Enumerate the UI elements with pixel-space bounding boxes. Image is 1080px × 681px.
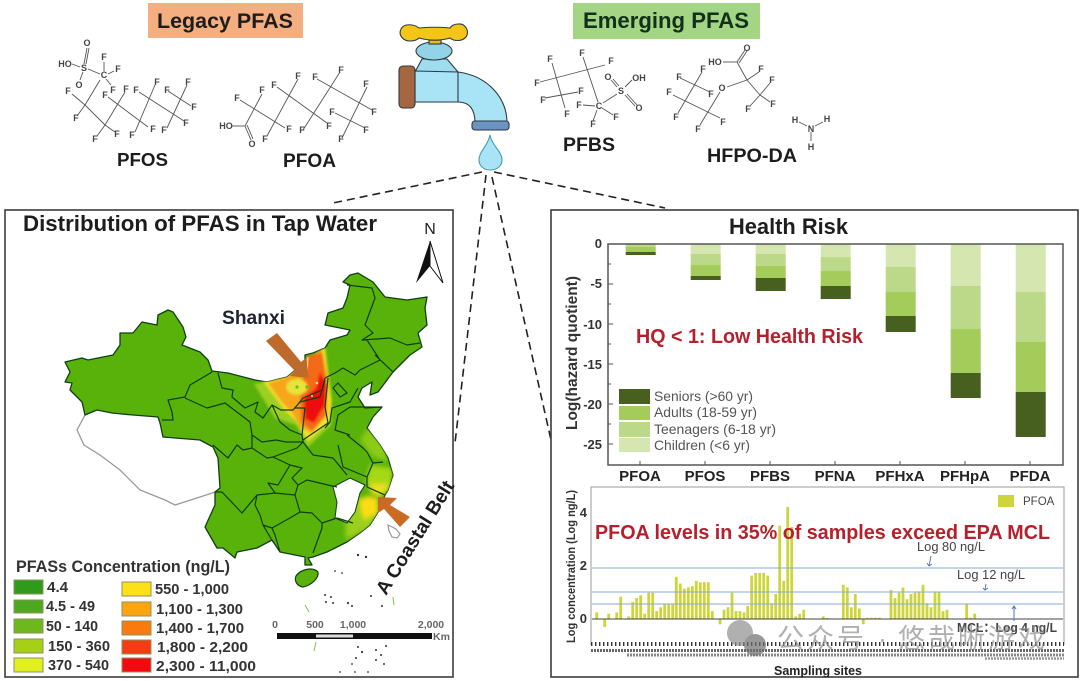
chemical structure: PFBS: F — [578, 86, 584, 96]
bar: PFHxA — [886, 244, 916, 332]
annotation: Log 80 ng/L — [917, 539, 985, 566]
label: A Coastal Belt: A Coastal Belt — [372, 477, 459, 599]
watermark text: 公众号·悠哉晰游戏 — [777, 624, 1045, 654]
x axis title: Sampling sites — [774, 664, 862, 678]
scale bar: Km — [433, 631, 450, 643]
bar: PFDA — [1016, 244, 1046, 437]
legend: PFASs concentration: 4.4 — [47, 579, 69, 596]
chemical structure: PFOS — [58, 38, 197, 144]
chemical structure: HFPO-DA: F — [720, 117, 726, 127]
panel: health risk — [551, 210, 1078, 678]
callout: low health risk: HQ < 1: Low Health Risk — [636, 326, 864, 348]
map: PFAS concentration across China — [65, 273, 427, 673]
arrow: pointing to Shanxi — [266, 333, 309, 378]
chemical structure: PFOA: F — [363, 79, 369, 89]
label: HFPO-DA: HFPO-DA — [707, 145, 797, 167]
panel: distribution of PFAS in tap water — [5, 210, 459, 677]
chemical structure: PFBS: O — [604, 72, 612, 82]
chemical structure: PFOS: S — [81, 63, 87, 73]
chemical structure: HFPO-DA: F — [770, 99, 776, 109]
chemical structure: ammonia — [792, 114, 830, 152]
chemical structure: PFBS: F — [590, 119, 596, 129]
y axis labels: -5 — [590, 276, 602, 291]
chemical structure: PFBS: F — [547, 54, 553, 64]
y axis labels: -20 — [583, 397, 602, 412]
chemical structure: PFBS: F — [579, 48, 585, 58]
bar chart: PFOA concentration by sampling site — [566, 487, 1064, 678]
annotation: MCL Log 4 ng/L — [957, 606, 1057, 635]
bar: PFBS — [756, 244, 786, 291]
label: PFBS: PFBS — [563, 134, 615, 156]
x axis ticks and site labels — [591, 644, 1064, 658]
chemical structure: PFOS: F — [65, 86, 71, 96]
y axis labels: 4 — [580, 505, 588, 520]
region: mainland base fill — [65, 273, 427, 565]
legend: PFASs concentration: 1,400 - 1,700 — [156, 620, 244, 637]
x axis labels: PFDA — [1010, 468, 1051, 485]
label: PFOS: PFOS — [117, 149, 168, 170]
bar chart: log hazard quotient by compound — [564, 236, 1063, 485]
chemical structure: PFOS: F — [191, 102, 197, 112]
chemical structure: PFOS: F — [150, 124, 156, 134]
chemical structure: PFOA: F — [262, 134, 268, 144]
icon: north arrow — [416, 221, 443, 283]
y axis labels: -25 — [583, 437, 602, 452]
heading: Legacy PFAS: Legacy PFAS — [157, 9, 293, 33]
chemical structure: PFOS: F — [110, 85, 116, 95]
chemical structure: PFBS: F — [540, 95, 546, 105]
chemical structure: PFBS: S — [618, 86, 624, 96]
legend: age groups — [619, 388, 776, 453]
legend: PFOA — [998, 495, 1055, 508]
legend: PFASs concentration: 550 - 1,000 — [155, 581, 229, 598]
chemical structure: PFOA: F — [338, 134, 344, 144]
chemical structure: PFBS: F — [534, 78, 540, 88]
connector: drop to distribution panel side — [455, 175, 486, 443]
scale bar: 500 — [306, 619, 324, 631]
y axis labels — [583, 236, 602, 452]
province boundaries — [162, 285, 420, 553]
chemical structure: ammonia: H — [824, 114, 830, 124]
legend: PFASs concentration: 2,300 - 11,000 — [156, 658, 256, 675]
chemical structure: PFOS: F — [185, 77, 191, 87]
heading: Legacy PFAS — [148, 3, 303, 38]
x axis labels: PFOS — [685, 468, 725, 485]
chemical structure: PFBS — [534, 48, 646, 129]
island: Hainan — [295, 569, 318, 587]
x axis labels: PFOA — [619, 468, 661, 485]
chemical structure: PFOA: F — [363, 125, 369, 135]
x axis labels: PFHpA — [940, 468, 990, 485]
legend: PFASs concentration — [14, 558, 256, 675]
connector: drop to health panel — [494, 172, 665, 208]
chemical structure: PFOA: F — [271, 80, 277, 90]
annotation: MCL Log 4 ng/L: MCL：Log 4 ng/L — [957, 620, 1057, 635]
label: PFOA: PFOA — [283, 151, 336, 172]
chemical structure: HFPO-DA: HO — [708, 57, 722, 67]
x axis labels: PFHxA — [875, 468, 925, 485]
scale bar — [272, 619, 450, 643]
legend: PFASs concentration: 50 - 140 — [46, 618, 98, 635]
island: Taiwan — [388, 525, 400, 538]
legend: age groups: Teenagers (6-18 yr) — [654, 421, 776, 437]
callout: PFOA exceedance: PFOA levels in 35% of samples exceed EPA MCL — [595, 522, 1050, 544]
legend: PFASs concentration: PFASs Concentration (ng/L) — [16, 558, 230, 576]
chemical structure: PFOA — [219, 65, 377, 149]
annotation: Log 12 ng/L — [957, 567, 1025, 590]
chemical structure: HFPO-DA: F — [676, 72, 682, 82]
icon: chat bubbles — [727, 620, 766, 656]
chemical structure: PFOS: F — [115, 64, 121, 74]
annotation: Log 12 ng/L: Log 12 ng/L — [957, 567, 1025, 582]
chemical structure: PFOA: F — [299, 125, 305, 135]
chemical structure: HFPO-DA: F — [695, 124, 701, 134]
x axis labels — [619, 468, 1051, 485]
icon: water drop — [479, 135, 502, 170]
x axis labels: PFNA — [815, 468, 856, 485]
chemical structure: PFOS: O — [83, 38, 91, 48]
bars: PFOA log concentration — [597, 507, 975, 627]
chemical structure: PFBS: F — [576, 100, 582, 110]
chemical structure: PFOS: F — [73, 113, 79, 123]
chemical structure: HFPO-DA: F — [745, 104, 751, 114]
chemical structure: PFOA: F — [295, 71, 301, 81]
chemical structure: PFOS: F — [164, 85, 170, 95]
chemical structure: PFOA: F — [326, 121, 332, 131]
y axis title: Log concentration (Log ng/L) — [566, 490, 578, 643]
chemical structure: HFPO-DA: F — [708, 89, 714, 99]
y axis labels — [580, 505, 588, 626]
chemical structure: PFOA: F — [234, 93, 240, 103]
y axis labels: -15 — [583, 357, 602, 372]
chemical structure: PFOS: F — [102, 90, 108, 100]
chemical structure: PFOA: F — [286, 124, 292, 134]
chemical structure: HFPO-DA: F — [700, 64, 706, 74]
heading: Emerging PFAS: Emerging PFAS — [583, 8, 749, 33]
chemical structure: PFOS: F — [183, 118, 189, 128]
chemical structure: PFOS: F — [133, 85, 139, 95]
chemical structure: PFOS: O — [75, 80, 83, 90]
reference lines: log 80, log 12, log 4 — [592, 568, 1063, 604]
legend: PFASs concentration: 150 - 360 — [48, 638, 110, 655]
icon: north arrow: N — [424, 221, 436, 238]
legend: PFASs concentration: 1,100 - 1,300 — [156, 601, 243, 618]
chemical structure: PFOA: F — [259, 85, 265, 95]
chemical structure: HFPO-DA: O — [743, 43, 751, 53]
connector: drop to health panel side — [492, 177, 551, 440]
region: Tibet no data outline — [77, 415, 215, 505]
chemical structure: HFPO-DA: F — [666, 87, 672, 97]
chemical structure: PFOS: F — [123, 84, 129, 94]
bar: PFOS — [691, 244, 721, 280]
scale bar: 1,000 — [340, 619, 366, 631]
chemical structure: PFOA: O — [248, 139, 256, 149]
y axis title: Log(hazard quotient) — [564, 276, 581, 430]
heading: Emerging PFAS — [573, 3, 760, 39]
bar: PFNA — [821, 244, 851, 299]
chemical structure: PFOS: HO — [58, 59, 72, 69]
chemical structure: HFPO-DA: F — [769, 75, 775, 85]
chemical structure: ammonia: N — [808, 124, 814, 134]
legend: PFOA: PFOA — [1023, 496, 1055, 508]
y axis labels: 2 — [580, 558, 587, 573]
region: Jiangxi no data — [333, 478, 365, 523]
chemical structure: PFOS: F — [154, 77, 160, 87]
legend: PFASs concentration: 370 - 540 — [48, 657, 109, 674]
chemical structure: HFPO-DA: F — [758, 64, 764, 74]
chemical structure: PFOS: F — [101, 52, 107, 62]
chemical structure: PFOS: F — [129, 130, 135, 140]
chemical structure: PFBS: C — [596, 101, 603, 111]
y axis labels: 0 — [595, 236, 602, 251]
chemical structure: ammonia: H — [792, 115, 798, 125]
islands: South China Sea — [324, 554, 387, 673]
chemical structure: PFBS: F — [608, 56, 614, 66]
chemical structure: HFPO-DA: F — [673, 112, 679, 122]
chemical structure: HFPO-DA: O — [718, 83, 726, 93]
chemical structure: PFOS: F — [114, 129, 120, 139]
scale bar: 2,000 — [418, 619, 444, 631]
chemical structure: HFPO-DA — [666, 43, 776, 134]
chemical structure: PFBS: F — [564, 109, 570, 119]
legend: PFASs concentration: 4.5 - 49 — [46, 598, 95, 615]
chemical structure: PFOS: F — [92, 134, 98, 144]
heading: Health Risk: Health Risk — [729, 214, 849, 239]
x axis labels: PFBS — [750, 468, 790, 485]
chemical structure: ammonia: H — [808, 142, 814, 152]
chemical structure: PFOA: HO — [219, 121, 233, 131]
chemical structure: PFBS: O — [635, 103, 643, 113]
scale bar: 0 — [272, 619, 278, 631]
region: concentration hotspots — [254, 347, 392, 540]
chemical structure: PFBS: F — [613, 112, 619, 122]
legend: age groups: Children (<6 yr) — [654, 437, 750, 453]
watermark — [727, 620, 1045, 656]
heading: Distribution of PFAS in Tap Water: Distribution of PFAS in Tap Water — [23, 211, 377, 236]
chemical structure: PFOA: F — [338, 65, 344, 75]
chemical structure: PFOS: C — [101, 70, 108, 80]
chemical structure: PFOA: F — [312, 72, 318, 82]
legend: age groups: Seniors (>60 yr) — [654, 388, 753, 404]
connector: drop to distribution panel — [333, 172, 482, 203]
label: Shanxi: Shanxi — [222, 308, 285, 329]
chemical structure: PFBS: OH — [632, 73, 646, 83]
arrow: pointing to coastal belt — [378, 497, 410, 527]
annotation: Log 80 ng/L: Log 80 ng/L — [917, 539, 985, 554]
chemical structure: PFOA: F — [371, 107, 377, 117]
chemical structure: PFOS: F — [161, 125, 167, 135]
icon: water faucet — [399, 24, 509, 130]
bar: PFHpA — [951, 244, 981, 398]
legend: age groups: Adults (18-59 yr) — [654, 404, 757, 420]
legend: PFASs concentration: 1,800 - 2,200 — [157, 639, 248, 656]
y axis labels: -10 — [583, 317, 602, 332]
bar: PFOA — [626, 244, 656, 255]
y axis labels: 0 — [580, 611, 587, 626]
chemical structure: PFOA: F — [329, 107, 335, 117]
